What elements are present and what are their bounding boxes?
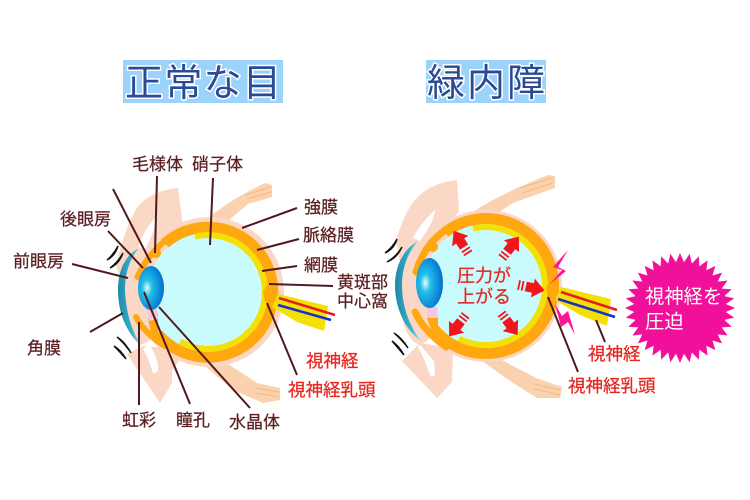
pressure arrow: upper left xyxy=(446,226,476,259)
title: normal eye: 正常な目 xyxy=(125,63,281,105)
lightning lower xyxy=(555,304,575,335)
labels: 虹彩 xyxy=(122,411,156,430)
diagram: glaucoma eye xyxy=(385,175,656,398)
labels: 瞳孔 xyxy=(176,411,210,430)
sclera xyxy=(410,210,562,362)
pressure arrow: right xyxy=(516,275,547,300)
pressure arrow: lower left xyxy=(442,309,473,342)
labels: 脈絡膜 xyxy=(303,226,354,245)
upper muscle xyxy=(200,183,272,226)
lens xyxy=(416,258,443,308)
upper eyelid xyxy=(116,188,183,292)
cornea xyxy=(395,241,422,342)
labels: 中心窩 xyxy=(337,292,388,311)
labels: 前眼房 xyxy=(13,252,64,271)
labels: 黄斑部 xyxy=(337,273,388,292)
lid slits xyxy=(413,210,435,377)
labels: 水晶体 xyxy=(229,413,280,432)
retina xyxy=(459,227,545,345)
lid slits xyxy=(138,216,158,373)
labels: 網膜 xyxy=(304,256,338,275)
callout: optic nerve compression burst xyxy=(625,253,735,363)
upper eyelid xyxy=(396,180,459,290)
pressure text xyxy=(457,266,511,307)
lens xyxy=(138,266,164,310)
labels: 角膜 xyxy=(27,339,61,358)
labels: 視神経 xyxy=(588,344,641,364)
labels: 硝子体 xyxy=(192,155,243,174)
labels: 強膜 xyxy=(304,198,338,217)
pressure arrow: upper right xyxy=(495,231,526,264)
labels: 視神経 xyxy=(306,351,359,371)
labels: 毛様体 xyxy=(132,155,183,174)
callout: optic nerve compression burst: 圧迫 xyxy=(645,311,684,333)
lightning upper xyxy=(549,250,568,285)
leader lines xyxy=(72,176,333,408)
optic nerve xyxy=(272,294,328,331)
optic nerve xyxy=(555,287,611,326)
lower eyelid xyxy=(127,346,188,403)
labels: 視神経乳頭 xyxy=(288,380,376,400)
labels xyxy=(13,155,388,432)
callout: optic nerve compression burst: 視神経を xyxy=(645,286,722,308)
ciliary body xyxy=(151,248,161,258)
lower muscle xyxy=(478,358,562,398)
choroid xyxy=(158,227,273,357)
eyelashes xyxy=(385,239,402,262)
labels: 視神経乳頭 xyxy=(568,376,656,396)
eyelashes xyxy=(107,246,123,268)
cornea xyxy=(118,248,143,347)
lower eyelid xyxy=(402,343,462,398)
labels xyxy=(568,344,656,396)
choroid xyxy=(433,219,554,354)
pressure text: 圧力が xyxy=(457,266,511,286)
vitreous body xyxy=(424,224,548,348)
upper muscle xyxy=(470,175,555,216)
pressure text: 上がる xyxy=(457,287,511,307)
vitreous body xyxy=(148,232,268,352)
labels: 後眼房 xyxy=(60,210,111,229)
iris strip xyxy=(147,309,158,321)
title: glaucoma: 緑内障 xyxy=(427,63,545,105)
retina xyxy=(180,235,265,349)
diagram: normal eye xyxy=(13,155,388,432)
ciliary body xyxy=(428,242,438,252)
leader lines xyxy=(548,297,605,372)
iris strip xyxy=(427,307,438,318)
pressure arrow: lower right xyxy=(494,308,525,341)
lower muscle xyxy=(198,360,280,403)
sclera xyxy=(134,217,284,367)
